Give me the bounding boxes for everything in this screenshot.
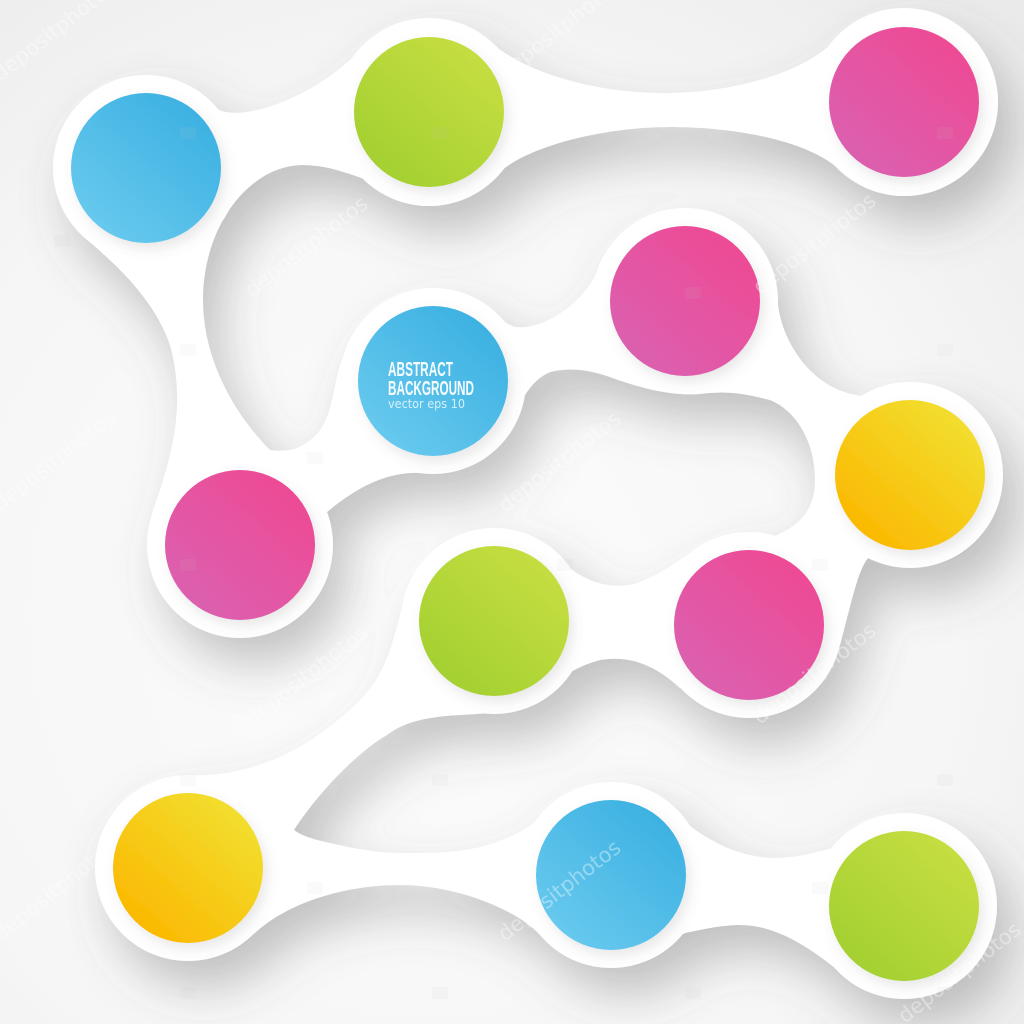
watermark text: depositphotos xyxy=(240,191,372,302)
circle: green bottom right xyxy=(829,831,979,981)
circle: pink left xyxy=(165,470,315,620)
circle: pink top right xyxy=(829,27,979,177)
circle: blue top left xyxy=(71,93,221,243)
title text in centre circle: ABSTRACT xyxy=(388,359,453,381)
watermark text: depositphotos xyxy=(240,620,372,731)
title text in centre circle: vector eps 10 xyxy=(388,397,465,411)
watermark camera marks xyxy=(54,127,953,999)
title text in centre circle: BACKGROUND xyxy=(388,378,474,400)
circle: green top xyxy=(354,37,504,187)
watermark text: depositphotos xyxy=(493,406,625,517)
watermark text: depositphotos xyxy=(748,188,880,299)
circle: yellow right xyxy=(835,400,985,550)
circle: yellow bottom left xyxy=(113,793,263,943)
circle: pink upper middle xyxy=(610,226,760,376)
watermark text: depositphotos xyxy=(748,618,880,729)
circle: green middle xyxy=(419,546,569,696)
circle: blue bottom xyxy=(536,800,686,950)
watermark text: depositphotos xyxy=(493,835,625,946)
title text in centre circle xyxy=(388,359,474,411)
circle: blue centre xyxy=(358,306,508,456)
circle: pink lower right xyxy=(674,550,824,700)
